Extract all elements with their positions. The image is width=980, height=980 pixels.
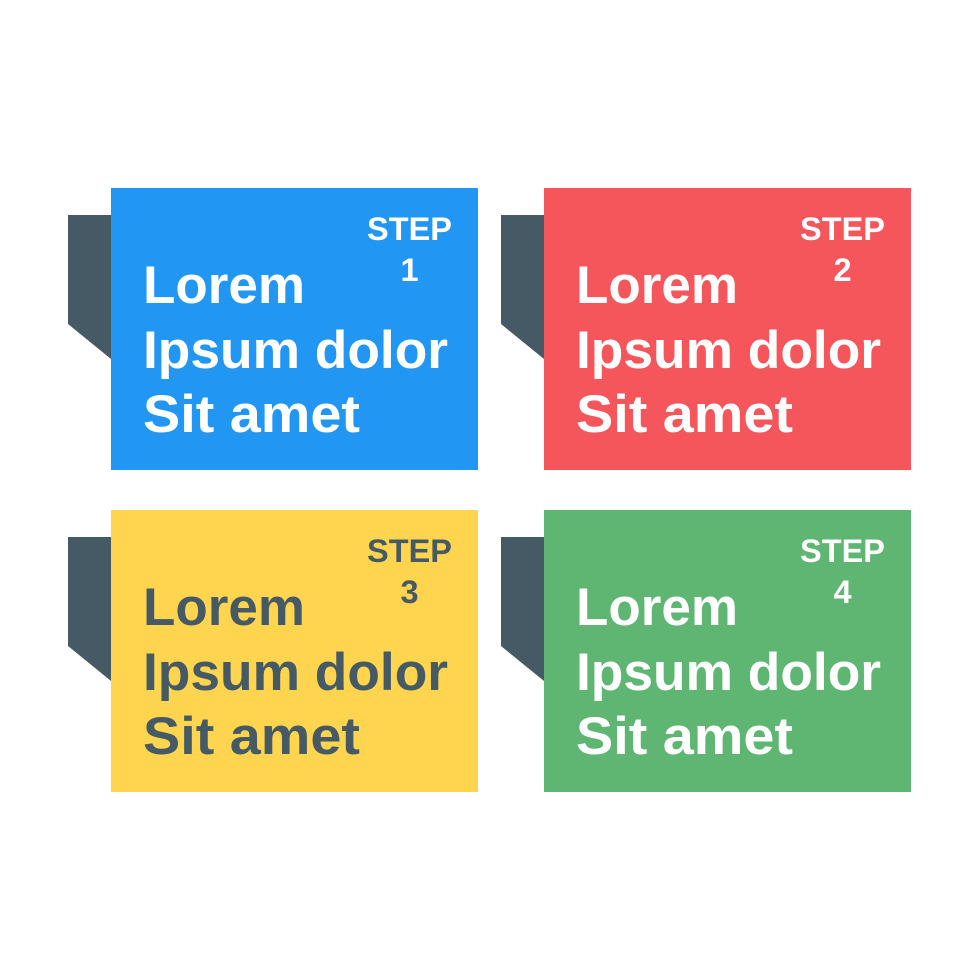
text block: step 1: Ipsum dolor (143, 321, 448, 380)
text block: step 2: Lorem (576, 256, 738, 315)
card: step 4 (501, 510, 911, 792)
text block: step 4: Lorem (576, 578, 738, 637)
tab: step 1 (68, 215, 111, 359)
tab: step 3 (68, 537, 111, 681)
text block: step 3: Sit amet (143, 707, 360, 766)
panel: step 1 (111, 188, 478, 470)
text block: step 4: Sit amet (576, 707, 793, 766)
tab: step 4 (501, 537, 544, 681)
label: step 4: STEP (800, 533, 885, 569)
card: step 1 (68, 188, 478, 470)
label: step 2: 2 (833, 252, 852, 288)
text block: step 1: Lorem (143, 256, 305, 315)
card: step 2 (501, 188, 911, 470)
panel: step 2 (544, 188, 911, 470)
text block: step 4 (576, 578, 881, 766)
text block: step 2: Sit amet (576, 385, 793, 444)
text block: step 1 (143, 256, 448, 444)
text block: step 3: Lorem (143, 578, 305, 637)
text block: step 3: Ipsum dolor (143, 643, 448, 702)
text block: step 3 (143, 578, 448, 766)
panel: step 3 (111, 510, 478, 792)
label: step 4: 4 (833, 574, 852, 610)
label: step 2: STEP (800, 211, 885, 247)
card: step 3 (68, 510, 478, 792)
text block: step 2: Ipsum dolor (576, 321, 881, 380)
label: step 1: STEP (367, 211, 452, 247)
tab: step 2 (501, 215, 544, 359)
text block: step 1: Sit amet (143, 385, 360, 444)
label: step 3: STEP (367, 533, 452, 569)
panel: step 4 (544, 510, 911, 792)
text block: step 4: Ipsum dolor (576, 643, 881, 702)
label: step 1: 1 (400, 252, 419, 288)
text block: step 2 (576, 256, 881, 444)
label: step 3: 3 (400, 574, 419, 610)
